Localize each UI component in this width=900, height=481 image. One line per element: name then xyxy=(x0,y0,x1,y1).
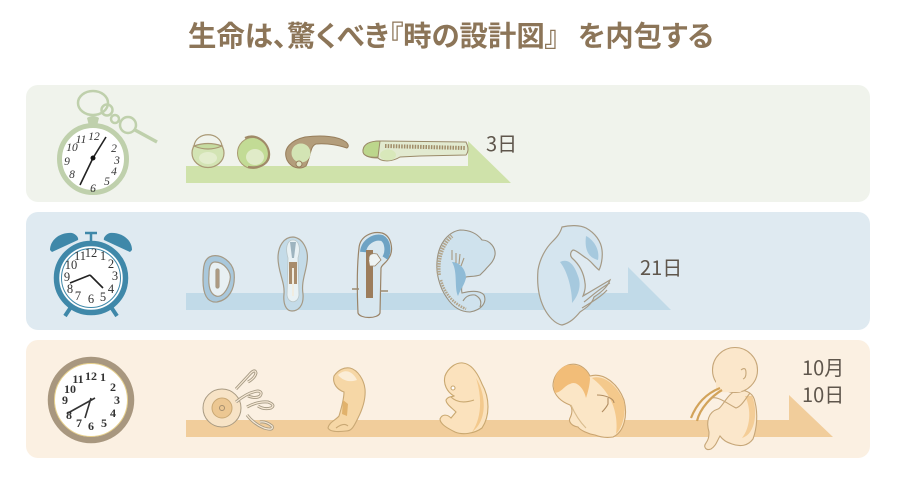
icon: pocket watch: 3 xyxy=(113,155,120,167)
icon: wall clock: 4 xyxy=(110,406,116,420)
icon: wall clock: 8 xyxy=(66,408,72,422)
icon: pocket watch: 11 xyxy=(76,134,86,146)
icon: alarm clock: 5 xyxy=(100,290,106,304)
icon: alarm clock: 2 xyxy=(108,257,114,271)
embryo: fetus profile xyxy=(553,364,626,437)
arrow: green timeline xyxy=(186,141,511,183)
icon: alarm clock: 1 xyxy=(100,249,106,263)
title: 生命は、驚くべき『時の設計図』 xyxy=(188,14,559,55)
arrow: blue timeline xyxy=(186,267,671,310)
icon: alarm clock: 12 xyxy=(85,246,97,260)
embryo: C-shaped with somites xyxy=(437,230,495,312)
panel: 21 days (blue) xyxy=(26,212,870,330)
icon: wall clock: 1 xyxy=(100,370,106,384)
icon: wall clock: 10 xyxy=(64,382,76,396)
embryo: larva xyxy=(363,141,468,161)
icon: wall clock: 7 xyxy=(76,416,82,430)
icon: wall clock: 2 xyxy=(110,380,116,394)
icon: wall clock: 12 xyxy=(85,369,97,383)
icon: pocket watch xyxy=(60,91,157,195)
icon: alarm clock: 9 xyxy=(64,270,70,284)
embryo: neural groove xyxy=(278,237,307,311)
embryo: late fetus with umbilical cord xyxy=(691,348,758,450)
icon: pocket watch: 6 xyxy=(90,183,96,195)
icon: wall clock xyxy=(51,360,131,440)
icon: wall clock: 6 xyxy=(88,419,94,433)
embryo: egg and sperm xyxy=(203,371,273,429)
label: 10 months 10 days: 10日 xyxy=(802,379,844,408)
embryo: flat disc xyxy=(203,256,234,302)
icon: pocket watch: 4 xyxy=(111,166,117,178)
embryo: curled orange xyxy=(440,363,488,434)
embryo: early egg xyxy=(192,135,224,168)
embryo: egg with body xyxy=(238,137,269,168)
arrow: orange timeline xyxy=(186,395,833,437)
label: 21 days: 21日 xyxy=(640,252,682,281)
icon: alarm clock: 4 xyxy=(108,282,115,296)
title: を内包する xyxy=(578,14,714,55)
label: 10 months 10 days: 10月 xyxy=(802,352,844,381)
icon: wall clock: 5 xyxy=(101,416,107,430)
icon: pocket watch: 9 xyxy=(64,156,70,168)
icon: alarm clock: 7 xyxy=(75,289,81,303)
icon: pocket watch: 12 xyxy=(88,131,100,143)
icon: alarm clock: 3 xyxy=(112,269,118,283)
icon: pocket watch: 5 xyxy=(104,176,110,188)
icon: alarm clock: 6 xyxy=(88,292,94,306)
icon: pocket watch: 10 xyxy=(66,142,78,154)
icon: alarm clock: 8 xyxy=(67,282,73,296)
icon: alarm clock: 11 xyxy=(74,249,86,263)
icon: wall clock: 11 xyxy=(72,372,84,386)
label: 3 days: 3日 xyxy=(486,128,517,157)
embryo: curled tail xyxy=(286,136,348,168)
icon: pocket watch: 8 xyxy=(69,169,75,181)
panel: 3 days (green) xyxy=(26,85,870,202)
panel: 10 months 10 days (orange) xyxy=(26,340,870,458)
icon: alarm clock xyxy=(50,233,132,316)
label: 10 months 10 days xyxy=(802,352,844,408)
embryo: early orange xyxy=(328,368,365,432)
icon: pocket watch: 2 xyxy=(111,143,117,155)
icon: wall clock: 3 xyxy=(114,393,120,407)
embryo: large folded xyxy=(538,226,610,325)
embryo: folding xyxy=(352,233,391,318)
icon: wall clock: 9 xyxy=(62,393,68,407)
icon: alarm clock: 10 xyxy=(65,258,77,272)
